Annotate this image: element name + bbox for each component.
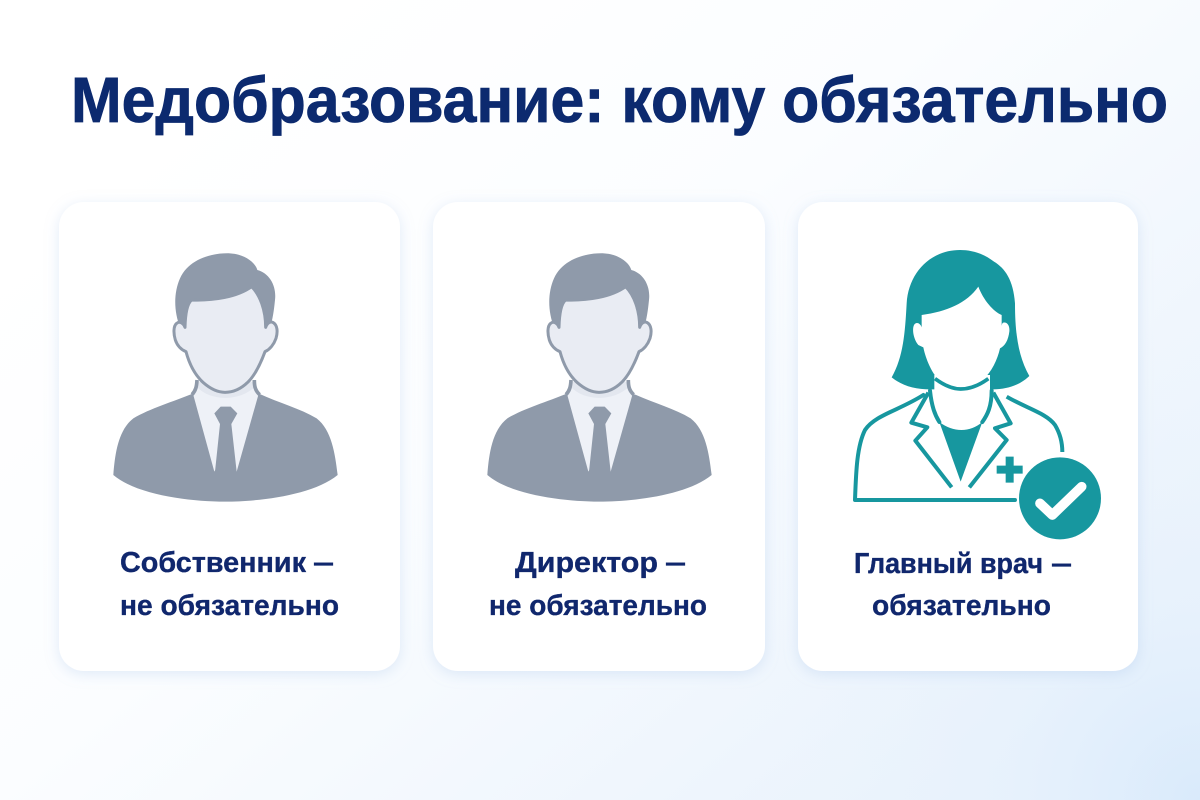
card: director <box>433 202 765 671</box>
panel: director <box>433 202 765 671</box>
title: Медобразование: кому обязательно <box>71 64 1168 136</box>
label: chief doctor: — <box>1052 548 1071 580</box>
label: chief doctor: обязательно <box>872 590 1051 622</box>
icon: man in suit (director) <box>487 253 712 502</box>
label: owner: не обязательно <box>120 590 339 622</box>
label: chief doctor: Главный врач <box>854 548 1043 580</box>
label: owner: Собственник <box>120 547 306 579</box>
label: director: — <box>666 547 685 579</box>
panel: owner <box>59 202 400 671</box>
icon: medical cross <box>997 457 1023 483</box>
card: owner <box>59 202 400 671</box>
label: director: не обязательно <box>489 590 707 622</box>
label: owner: — <box>314 547 333 579</box>
label: director: Директор <box>515 547 658 579</box>
icon: man in suit (owner) <box>113 253 338 502</box>
icon: check badge <box>1019 457 1101 539</box>
card: chief doctor <box>798 202 1138 671</box>
panel: chief doctor <box>798 202 1138 671</box>
icon: woman doctor with check mark <box>855 250 1101 539</box>
